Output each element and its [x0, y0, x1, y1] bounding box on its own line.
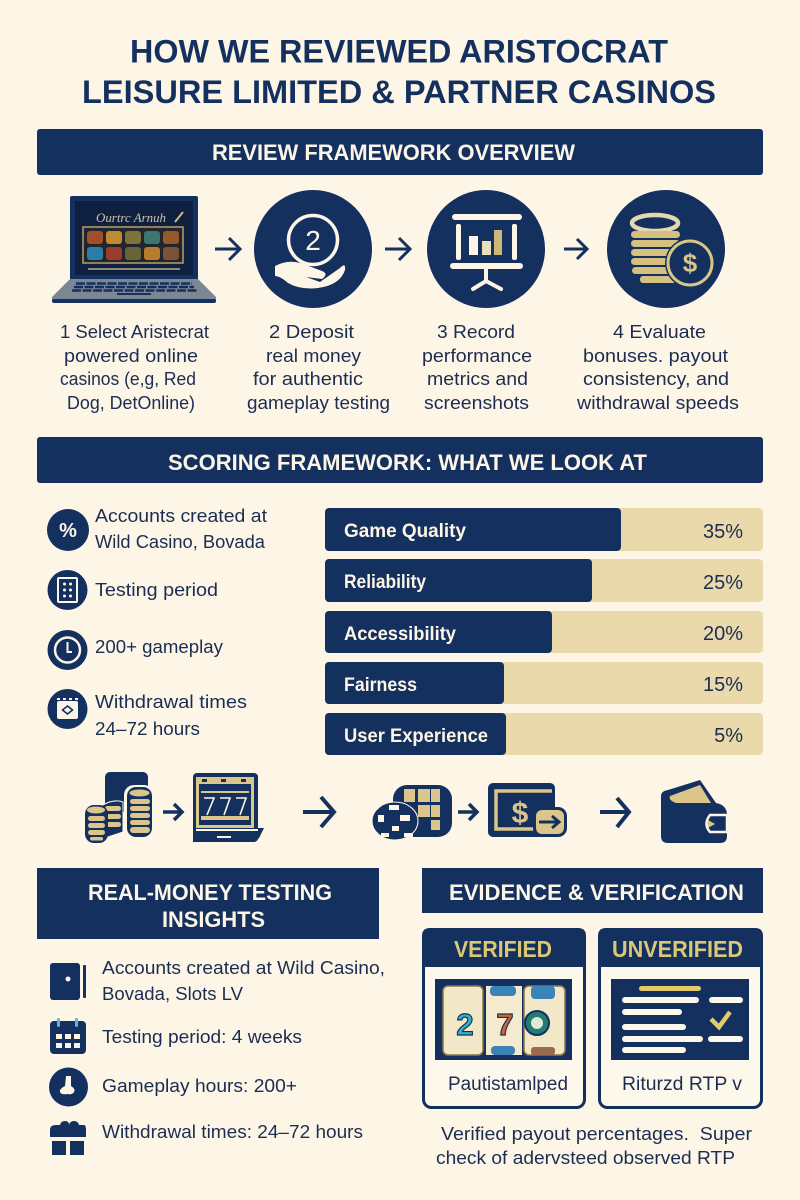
heading: evidence and verification: EVIDENCE & VERIFICATION [449, 880, 744, 905]
heading: scoring framework: SCORING FRAMEWORK: WHAT WE LOOK AT [168, 450, 648, 475]
bar: accessibility: Accessibility [344, 624, 456, 645]
icon: casino chips [372, 785, 452, 840]
bar: fairness [325, 662, 763, 704]
text: step 4 [576, 321, 739, 413]
list item: gameplay [48, 630, 224, 670]
bar: user experience [325, 713, 763, 755]
arrow [458, 804, 477, 820]
icon: laptop with slot game: Ourtrc Arnuh [96, 210, 166, 225]
list item: accounts: Accounts created at [95, 505, 267, 526]
text: step 2 [247, 321, 390, 413]
image: document with check [611, 979, 749, 1060]
text: step 4: bonuses. payout [583, 345, 728, 366]
list item: withdrawal [48, 689, 247, 739]
list item: withdrawal times: Withdrawal times: 24–72 hours [102, 1121, 363, 1142]
icon: cash out card [488, 783, 567, 837]
card: unverified: Riturzd RTP v [622, 1074, 743, 1095]
heading: scoring framework [37, 437, 763, 483]
icon: deposit hand with coin: 2 [305, 225, 321, 256]
list item: accounts: % [59, 520, 77, 542]
list item: gameplay hours [49, 1068, 297, 1106]
icon: slot tablet [193, 773, 264, 842]
heading: real-money testing insights: REAL-MONEY TESTING [88, 880, 332, 905]
title: LEISURE LIMITED & PARTNER CASINOS [82, 74, 716, 110]
text: step 3: metrics and [427, 368, 528, 389]
card: verified: Pautistamlped [448, 1074, 568, 1095]
text: step 1 [60, 321, 209, 413]
bar: reliability [325, 559, 763, 602]
icon row: money flow [85, 772, 727, 843]
card: verified: VERIFIED [454, 936, 552, 962]
list item: testing period [48, 570, 218, 610]
text: step 4: consistency, and [583, 368, 729, 389]
panel: real-money testing insights [37, 868, 385, 1155]
title [82, 34, 716, 110]
panel: scoring framework [37, 437, 763, 755]
text: verification note: Verified payout percentages. Super [441, 1123, 752, 1144]
bar: game quality: Game Quality [344, 521, 466, 542]
heading: review framework overview: REVIEW FRAMEWORK OVERVIEW [212, 140, 575, 165]
bar: accessibility [325, 611, 763, 653]
text: step 2: for authentic [253, 368, 363, 389]
icon: coins and card [85, 772, 154, 843]
text: step 3: screenshots [424, 392, 529, 413]
bar: fairness: Fairness [344, 675, 417, 696]
arrow [600, 798, 629, 827]
image: slot reels [435, 979, 572, 1060]
bar: accessibility: 20% [703, 623, 743, 645]
list item: withdrawal times [50, 1121, 363, 1155]
icon: presentation board chart [427, 190, 545, 308]
list item: testing period: Testing period: 4 weeks [102, 1026, 302, 1047]
bar: user experience: 5% [714, 725, 743, 747]
card: unverified: UNVERIFIED [612, 936, 743, 962]
image: slot reels: 2 [456, 1007, 474, 1042]
card: verified [422, 928, 586, 1108]
text: step 1: powered online [64, 345, 198, 366]
text: step 1: 1 Select Aristecrat [60, 321, 209, 342]
title: HOW WE REVIEWED ARISTOCRAT [130, 34, 668, 70]
list item: accounts [50, 957, 385, 1004]
arrow [385, 238, 410, 260]
text: step 3: performance [422, 345, 532, 366]
list item: testing period [50, 1018, 302, 1054]
heading: evidence and verification [422, 868, 763, 913]
arrow [163, 804, 182, 820]
icon: deposit hand with coin [254, 190, 372, 308]
text: step 3: 3 Record [437, 321, 515, 342]
list item: accounts: Wild Casino, Bovada [95, 531, 266, 552]
text: step 3 [422, 321, 532, 413]
heading: review framework overview [37, 129, 763, 175]
text: step 4: withdrawal speeds [576, 392, 739, 413]
arrow [303, 797, 334, 827]
bar: user experience: User Experience [344, 726, 488, 747]
bar: game quality [325, 508, 763, 551]
bar chart: scoring weights [325, 508, 763, 755]
text: step 2: 2 Deposit [269, 321, 354, 342]
heading: real-money testing insights: INSIGHTS [162, 907, 265, 932]
list item: testing period: Testing period [95, 579, 218, 600]
list item: accounts: Bovada, Slots LV [102, 983, 244, 1004]
card: unverified [598, 928, 763, 1108]
list item: gameplay hours: Gameplay hours: 200+ [102, 1075, 297, 1096]
panel: review framework overview [37, 129, 763, 413]
arrow [564, 239, 587, 259]
heading: real-money testing insights [37, 868, 379, 939]
text: step 1: Dog, DetOnline) [67, 392, 195, 413]
icon: cash out card: $ [512, 797, 529, 830]
text: step 2: gameplay testing [247, 392, 390, 413]
text: step 1: casinos (e,g, Red [60, 368, 196, 389]
arrow [215, 238, 240, 260]
list item: accounts: Accounts created at Wild Casino, [102, 957, 385, 978]
icon: chips and dollar coin: $ [683, 248, 698, 278]
list item: withdrawal: Withdrawal times [95, 691, 247, 712]
text: verification note: check of adervsteed observed RTP [436, 1147, 735, 1168]
list item: withdrawal: 24–72 hours [95, 718, 200, 739]
text: step 4: 4 Evaluate [613, 321, 706, 342]
bar: fairness: 15% [703, 674, 743, 696]
bar: reliability: Reliability [344, 572, 426, 593]
bar: reliability: 25% [703, 572, 743, 594]
panel: evidence and verification [422, 868, 763, 1168]
text: step 2: real money [266, 345, 362, 366]
text: verification note [436, 1123, 752, 1168]
list item: accounts [47, 505, 267, 552]
list item: gameplay: 200+ gameplay [95, 636, 224, 657]
icon: chips and dollar coin [607, 190, 725, 308]
image: slot reels: 7 [496, 1007, 514, 1042]
icon: laptop with slot game [52, 196, 216, 303]
bar: game quality: 35% [703, 521, 743, 543]
icon: wallet [661, 780, 727, 843]
